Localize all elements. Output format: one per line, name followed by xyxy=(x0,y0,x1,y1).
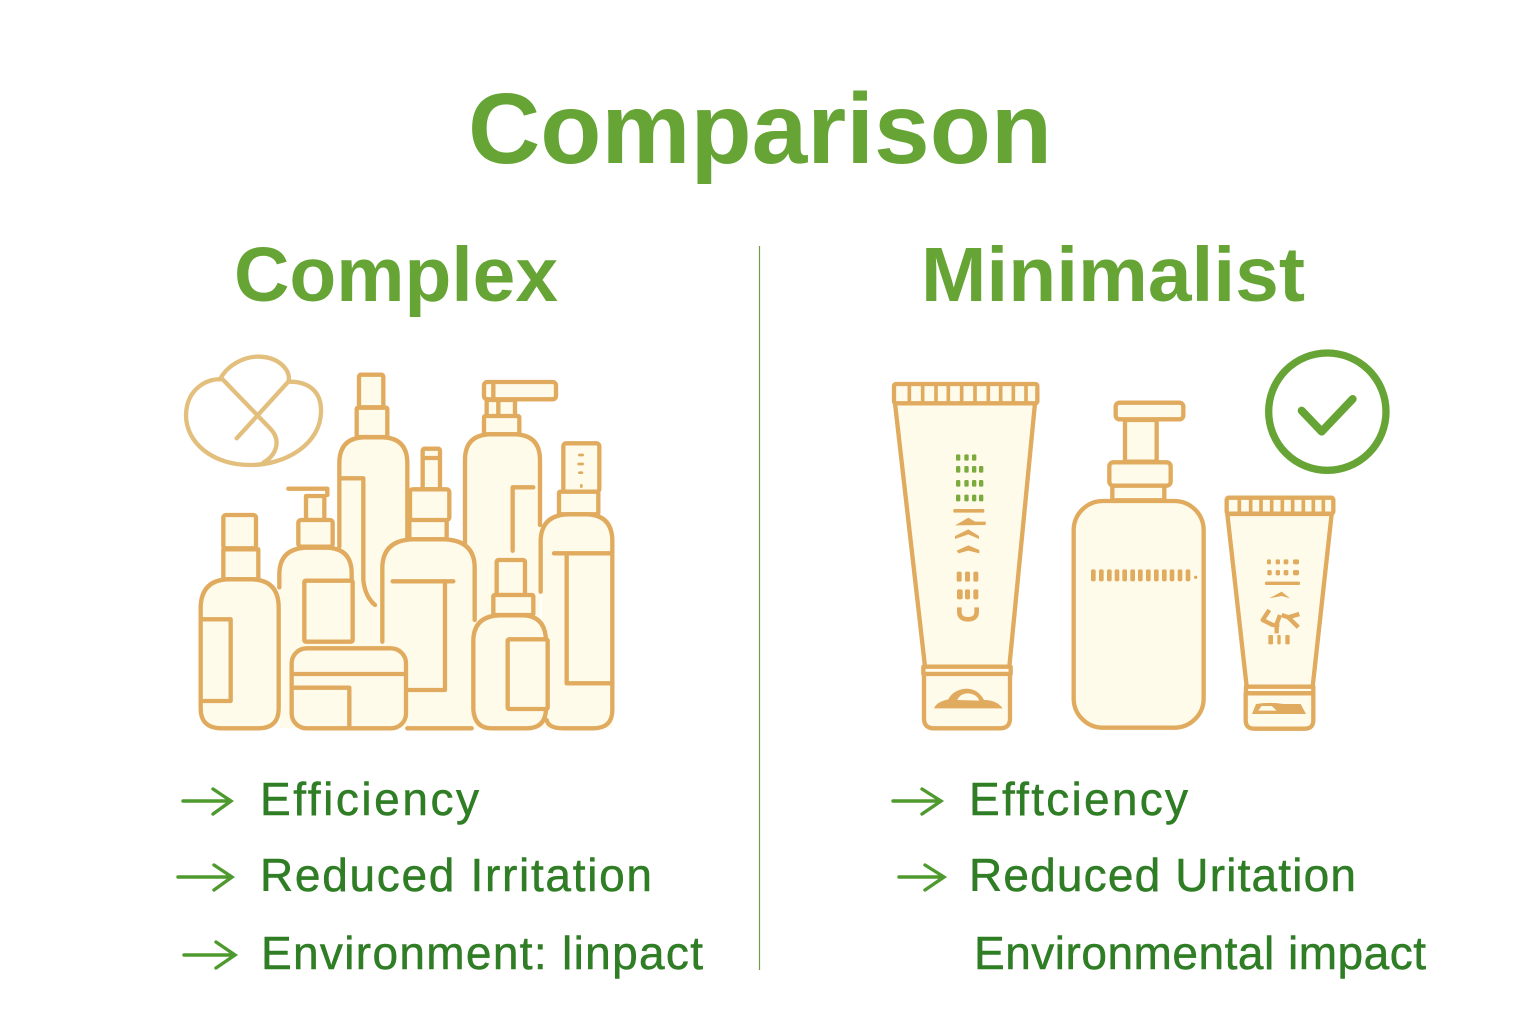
tube glyph marks xyxy=(934,509,1003,708)
title: Comparison xyxy=(468,73,1052,185)
small tube glyph marks xyxy=(1252,559,1306,714)
illustration: cluttered group of bottles xyxy=(186,357,612,728)
small tube xyxy=(1227,498,1333,729)
list: minimalist xyxy=(893,773,1426,979)
text: efficiency: Efficiency xyxy=(260,773,479,825)
text: reduced irritation: Reduced Uritation xyxy=(969,849,1356,901)
arrow xyxy=(899,865,944,890)
heading: complex: Complex xyxy=(234,232,558,318)
bottle: right spray xyxy=(541,443,612,728)
pump bottle xyxy=(1074,403,1204,728)
jar xyxy=(292,648,406,728)
heading: minimalist: Minimalist xyxy=(921,232,1305,318)
text: environment impact: Environment: linpact xyxy=(261,927,703,979)
text: efficiency: Efftciency xyxy=(969,773,1188,825)
bottle: wide centre xyxy=(382,449,475,728)
icon: tangled knot cloud xyxy=(186,357,321,465)
bottle: tall spray xyxy=(338,375,408,728)
large tube xyxy=(894,384,1037,728)
green dots label xyxy=(956,454,983,501)
bottle dash label xyxy=(1091,569,1197,581)
arrow xyxy=(183,789,231,814)
bottle: left xyxy=(201,515,279,728)
arrow xyxy=(178,865,232,890)
arrow xyxy=(893,789,941,814)
bottle: tall pump xyxy=(465,382,556,728)
text: reduced irritation: Reduced Irritation xyxy=(260,849,652,901)
icon: check mark badge xyxy=(1269,353,1386,470)
bottle: small pump xyxy=(279,489,353,728)
arrow xyxy=(184,942,235,968)
bottle: small front xyxy=(473,560,548,728)
illustration: minimalist products xyxy=(894,353,1386,729)
text: environmental impact: Environmental impact xyxy=(974,927,1426,979)
list: complex xyxy=(178,773,703,979)
